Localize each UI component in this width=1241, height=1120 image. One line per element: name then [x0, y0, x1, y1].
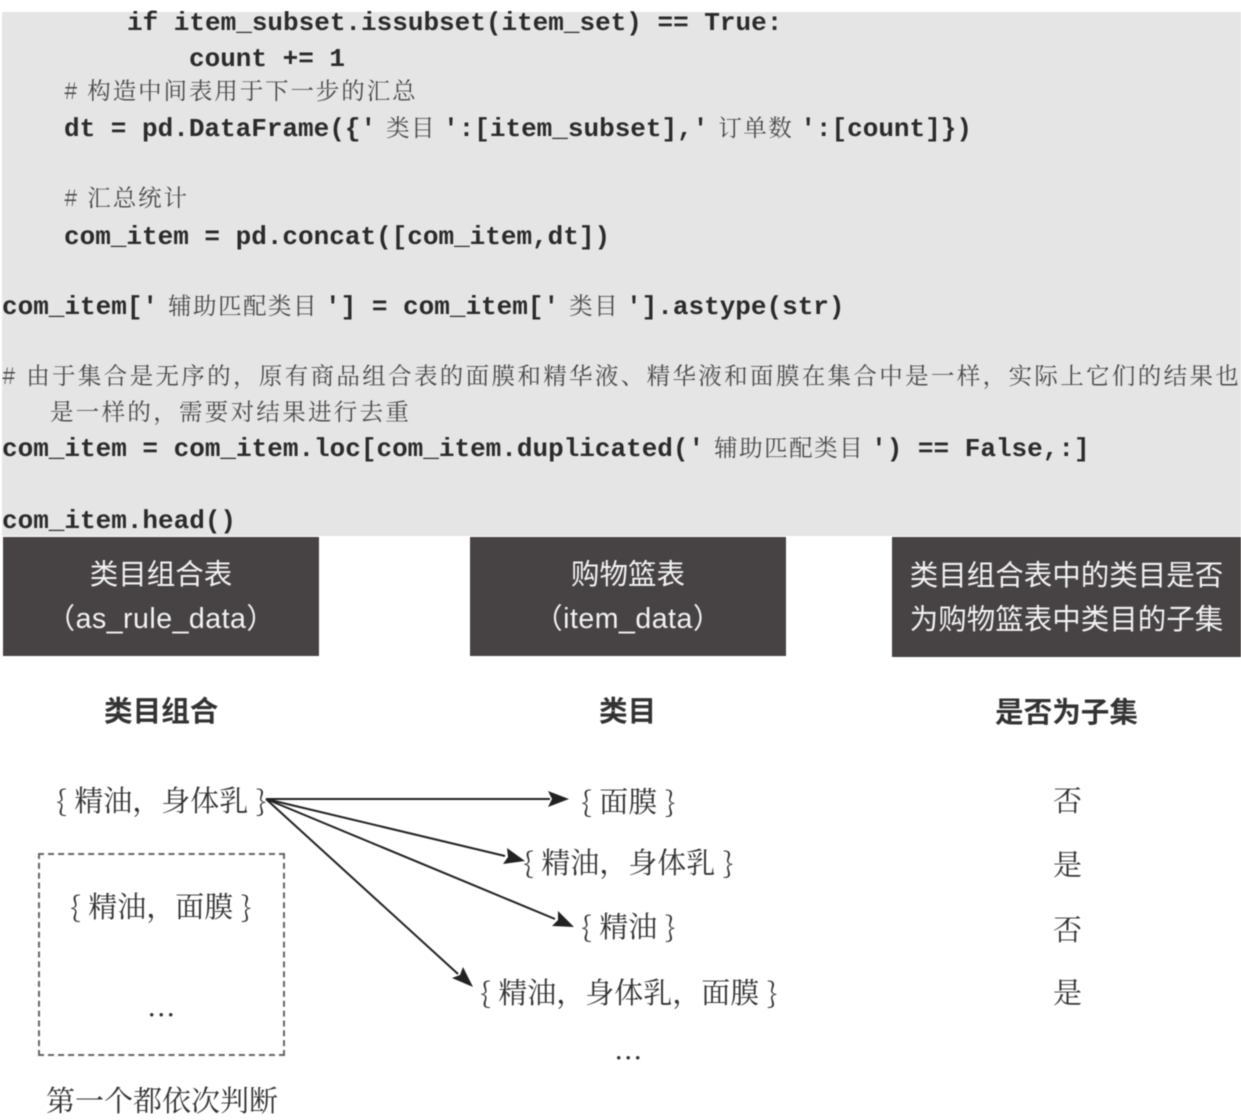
- source ellipsis: ...: [147, 984, 175, 1025]
- header: category combination table: [3, 537, 319, 656]
- header: category combination table: （as_rule_data）: [47, 603, 275, 635]
- code line: head: com_item.head(): [2, 506, 236, 536]
- code line: duplicated: com_item = com_item.loc[com_item.duplicated(' ') == False,:]: [2, 434, 1090, 464]
- header: subset check: 类目组合表中的类目是否: [910, 560, 1223, 592]
- code line: duplicated: 辅助匹配类目: [714, 429, 864, 463]
- column title: is subset: 是否为子集: [995, 697, 1138, 729]
- header: basket table: 购物篮表: [571, 559, 685, 591]
- code line: helper column: 类目: [569, 287, 619, 321]
- result: no: 否: [1053, 908, 1082, 949]
- code comment: dedupe line 2: 是一样的，需要对结果进行去重: [50, 393, 411, 427]
- header: subset check: [892, 537, 1241, 657]
- dashed box: [38, 853, 285, 1056]
- result: yes: 是: [1053, 971, 1082, 1012]
- column title: combination: 类目组合: [104, 696, 218, 728]
- target item: oil and lotion: { 精油，身体乳 }: [523, 841, 734, 882]
- result: no: 否: [1053, 779, 1082, 820]
- code line: dt: 类目: [386, 109, 436, 143]
- code line: concat: com_item = pd.concat([com_item,dt]): [64, 222, 610, 252]
- header: subset check: 为购物篮表中类目的子集: [910, 604, 1223, 636]
- target item: mask: { 面膜 }: [581, 780, 676, 821]
- result: yes: 是: [1053, 843, 1082, 884]
- code line: dt: 订单数: [718, 109, 793, 143]
- header: category combination table: 类目组合表: [90, 559, 232, 591]
- code line: if: if item_subset.issubset(item_set) == True:: [127, 8, 782, 38]
- source item: essential oil and body lotion: { 精油，身体乳 }: [56, 779, 267, 820]
- source item: essential oil and mask: { 精油，面膜 }: [70, 885, 252, 926]
- code comment: intermediate table: # 构造中间表用于下一步的汇总: [64, 72, 418, 106]
- header: basket table: [470, 537, 786, 656]
- code block: [2, 12, 1241, 536]
- target item: oil: { 精油 }: [581, 905, 676, 946]
- code line: count: count += 1: [189, 44, 345, 74]
- code comment: dedupe line 1: # 由于集合是无序的，原有商品组合表的面膜和精华液、精华液和面膜在集合中是一样，实际上它们的结果也: [2, 357, 1241, 391]
- caption: 第一个都依次判断: [46, 1079, 278, 1120]
- code line: helper column: 辅助匹配类目: [168, 287, 318, 321]
- target item: oil, lotion, mask: { 精油，身体乳，面膜 }: [480, 971, 778, 1012]
- column title: category: 类目: [599, 696, 656, 728]
- code line: dt: dt = pd.DataFrame({' ':[item_subset],' ':[count]}): [64, 114, 972, 144]
- code line: helper column: com_item[' '] = com_item[' '].astype(str): [2, 292, 845, 322]
- target ellipsis: ...: [614, 1027, 642, 1068]
- code comment: summary: # 汇总统计: [64, 179, 189, 213]
- header: basket table: （item_data）: [534, 603, 722, 635]
